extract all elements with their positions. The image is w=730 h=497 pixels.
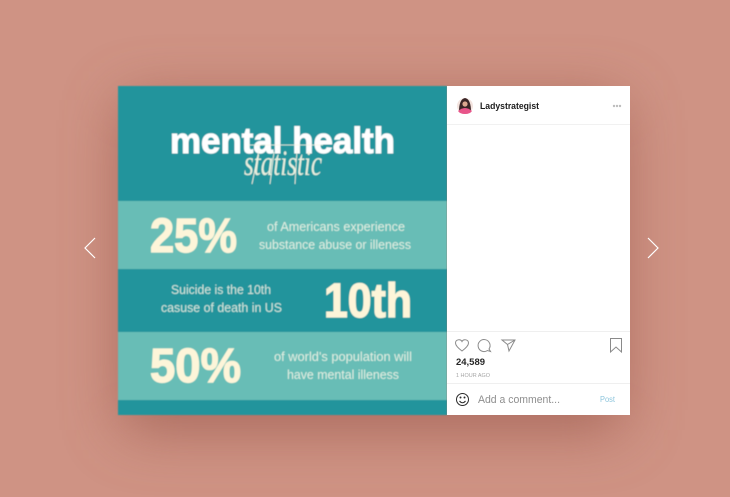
number: 10th: 10th bbox=[324, 275, 412, 328]
avatar bbox=[457, 98, 473, 114]
band: 10th cause bbox=[118, 269, 447, 332]
right arrow bbox=[648, 238, 658, 258]
icon: heart bbox=[456, 340, 468, 351]
script subtitle: statistic bbox=[244, 143, 323, 184]
header divider bbox=[447, 124, 630, 125]
text: world population statistic: of world's population will bbox=[274, 349, 412, 364]
icon: comment bbox=[478, 340, 490, 352]
text: suicide statistic bbox=[161, 282, 282, 315]
text: world population statistic: have mental illeness bbox=[287, 367, 399, 382]
script subtitle: statistic: statistic bbox=[244, 143, 322, 183]
text: suicide statistic: Suicide is the 10th bbox=[171, 282, 271, 297]
icon: smiley bbox=[456, 394, 468, 406]
icon: bookmark bbox=[610, 338, 622, 352]
number: 50%: 50% bbox=[150, 340, 241, 393]
panel: teal statistics post bbox=[118, 86, 447, 415]
post button: Post bbox=[600, 395, 616, 404]
text: Americans statistic: substance abuse or illeness bbox=[259, 237, 411, 252]
timestamp: 1 HOUR AGO bbox=[456, 373, 491, 379]
actions divider bbox=[447, 331, 630, 332]
likes count: 24,589 bbox=[456, 357, 485, 367]
text: Americans statistic bbox=[259, 219, 411, 252]
title bbox=[170, 120, 395, 184]
left arrow bbox=[85, 238, 95, 258]
number: 25%: 25% bbox=[150, 210, 237, 263]
heading: mental health: mental health bbox=[170, 120, 395, 161]
band: 50 percent bbox=[118, 332, 447, 400]
text: world population statistic bbox=[274, 349, 412, 382]
text: Americans statistic: of Americans experience bbox=[267, 219, 405, 234]
comment divider bbox=[447, 383, 630, 384]
panel: instagram sidebar bbox=[447, 86, 630, 415]
text: suicide statistic: casuse of death in US bbox=[161, 300, 282, 315]
comment placeholder: Add a comment... bbox=[478, 394, 560, 406]
username: Ladystrategist bbox=[480, 101, 539, 111]
band: 25 percent bbox=[118, 201, 447, 269]
icon: share bbox=[502, 340, 515, 351]
more options icon bbox=[613, 105, 621, 107]
